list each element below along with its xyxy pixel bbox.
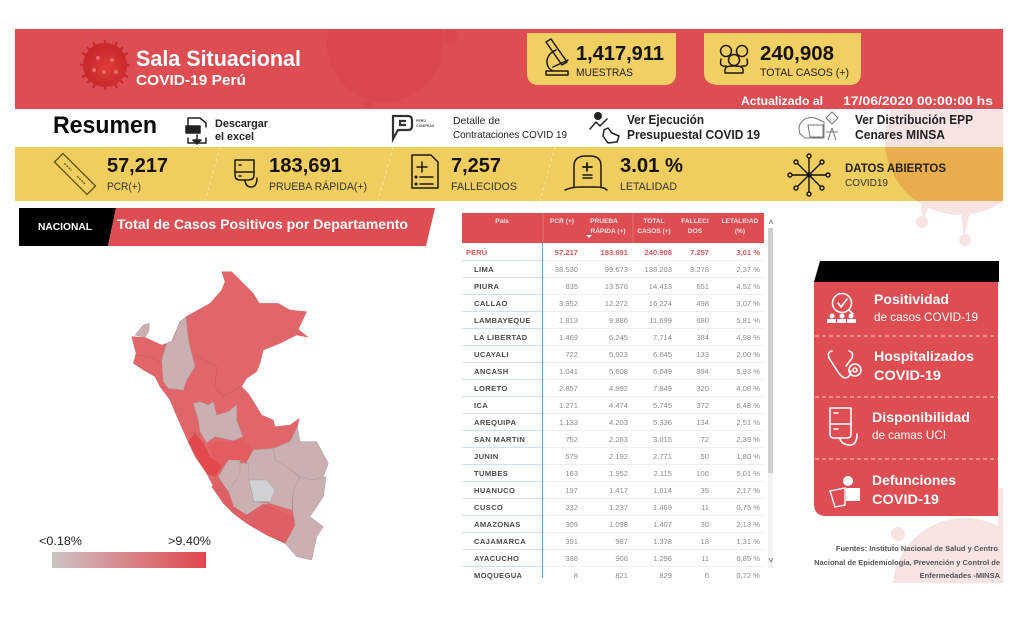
map: high positivity departments <box>132 272 308 543</box>
table rows: CAJAMARCA <box>474 537 526 546</box>
table rows: 1.378 <box>653 537 672 546</box>
section header: total de casos: Total de Casos Positivos por Departamento <box>117 216 408 232</box>
link: peru compras: Detalle de <box>453 115 500 127</box>
table rows: 987 <box>615 537 628 546</box>
table rows: 6,48 % <box>736 401 760 410</box>
subtitle: COVID-19 Perú <box>136 73 246 89</box>
nav item: disponibilidad: Disponibilidad <box>872 409 970 425</box>
table rows: 11 <box>701 503 709 512</box>
table rows: 1.469 <box>559 333 578 342</box>
table rows: ANCASH <box>474 367 509 376</box>
table rows: 0,85 % <box>736 554 760 563</box>
link: distribucion EPP: Cenares MINSA <box>855 128 945 142</box>
table header: PRUEBA <box>590 218 618 225</box>
table rows: 5.336 <box>653 418 672 427</box>
table rows: 133 <box>696 350 709 359</box>
link: distribucion EPP <box>799 112 973 142</box>
table rows: 384 <box>696 333 709 342</box>
table rows: 4,08 % <box>736 384 760 393</box>
decorative virus background right <box>885 110 1003 583</box>
kpi: prueba rapida: 183,691 <box>269 155 342 177</box>
table rows: 5.608 <box>609 367 628 376</box>
table header: FALLECI <box>681 218 709 225</box>
table rows: 1,80 % <box>736 452 760 461</box>
table rows: SAN MARTIN <box>474 435 525 444</box>
kpi: fallecidos <box>412 155 517 193</box>
table rows: 5.923 <box>609 350 628 359</box>
table rows: 16.224 <box>649 299 672 308</box>
kpi: datos abiertos: COVID19 <box>845 177 888 189</box>
kpi: datos abiertos <box>788 154 946 196</box>
table header: LETALIDAD <box>722 218 759 225</box>
kpi: pcr: PCR(+) <box>107 181 141 193</box>
table rows: AREQUIPA <box>474 418 516 427</box>
links row <box>53 112 973 144</box>
table rows: 106 <box>696 469 709 478</box>
update date: Actualizado al <box>741 94 823 108</box>
table rows: 4,98 % <box>736 333 760 342</box>
table rows: 11.699 <box>649 316 672 325</box>
table rows: 2,13 % <box>736 520 760 529</box>
table row separators <box>462 243 764 578</box>
table total row: 3,01 % <box>736 248 760 257</box>
table rows: 908 <box>615 554 628 563</box>
table rows: 72 <box>701 435 709 444</box>
table rows: 232 <box>565 503 578 512</box>
table rows: 1.407 <box>653 520 672 529</box>
sources note <box>814 544 1001 580</box>
card: muestras: MUESTRAS <box>576 67 633 79</box>
card: muestras <box>527 33 676 85</box>
kpi: pcr: 57,217 <box>107 155 168 177</box>
nav item: positividad <box>827 291 978 324</box>
table rows: 7.714 <box>653 333 672 342</box>
link: peru compras: COMPRAS <box>416 124 435 128</box>
table rows: 2,17 % <box>736 486 760 495</box>
table rows: 394 <box>696 367 709 376</box>
map legend: <0.18% <box>39 534 82 548</box>
nav item: defunciones: COVID-19 <box>872 491 939 507</box>
table header: PCR (+) <box>550 218 574 225</box>
table rows: 1.098 <box>609 520 628 529</box>
table rows: 163 <box>565 469 578 478</box>
table header: (%) <box>735 228 745 235</box>
table rows: ICA <box>474 401 488 410</box>
link: peru compras: PERÚ <box>416 118 426 123</box>
table rows: PIURA <box>474 282 500 291</box>
table rows: 134 <box>696 418 709 427</box>
table rows: 821 <box>615 571 628 580</box>
nav item: hospitalizados: Hospitalizados <box>874 348 974 364</box>
table rows: 372 <box>696 401 709 410</box>
table rows: LIMA <box>474 265 494 274</box>
map: central department <box>208 438 253 467</box>
table rows: 7.849 <box>653 384 672 393</box>
card: total casos: 240,908 <box>760 43 834 65</box>
table rows: 11 <box>701 554 709 563</box>
kpi: prueba rapida: PRUEBA RÁPIDA(+) <box>269 180 367 193</box>
table rows: 6.245 <box>609 333 628 342</box>
table rows: AMAZONAS <box>474 520 521 529</box>
table rows: 1.271 <box>559 401 578 410</box>
table header: TOTAL <box>643 218 665 225</box>
nav item: defunciones <box>830 472 956 507</box>
table rows: UCAYALI <box>474 350 509 359</box>
map of Peru <box>132 272 328 560</box>
kpi: fallecidos: FALLECIDOS <box>451 181 517 193</box>
panel: navigation <box>814 261 999 516</box>
table rows: 138.203 <box>645 265 672 274</box>
table rows: 2.857 <box>559 384 578 393</box>
table rows: 579 <box>565 452 578 461</box>
table rows: 4,52 % <box>736 282 760 291</box>
table rows: 2.771 <box>653 452 672 461</box>
table rows: 5,93 % <box>736 367 760 376</box>
link: peru compras <box>393 115 567 141</box>
table header: CASOS (+) <box>637 228 671 235</box>
icon: microscope <box>546 39 568 75</box>
map: internal borders <box>137 355 240 433</box>
table rows: CUSCO <box>474 503 503 512</box>
table rows: 2.192 <box>609 452 628 461</box>
table rows: 6.649 <box>653 367 672 376</box>
kpi: letalidad: 3.01 % <box>620 155 683 177</box>
table rows: 0,72 % <box>736 571 760 580</box>
table rows: 1.469 <box>653 503 672 512</box>
nav item: positividad: de casos COVID-19 <box>874 310 978 324</box>
nav item: disponibilidad: de camas UCI <box>872 428 946 442</box>
map legend: >9.40% <box>168 534 211 548</box>
table rows: 1.237 <box>609 503 628 512</box>
table rows: 388 <box>565 554 578 563</box>
table rows: TUMBES <box>474 469 508 478</box>
link: peru compras: Contrataciones COVID 19 <box>453 129 567 141</box>
table rows: 3.278 <box>690 265 709 274</box>
icon: people <box>720 46 748 73</box>
sources note: Enfermedades -MINSA <box>920 571 1001 580</box>
table total row: 7.257 <box>690 248 709 257</box>
kpi: letalidad: LETALIDAD <box>620 181 677 193</box>
update date: 17/06/2020 00:00:00 hs <box>843 94 993 108</box>
table rows: 835 <box>565 282 578 291</box>
link: descargar excel: el excel <box>215 131 254 143</box>
sources note: Nacional de Epidemiología, Prevención y Control de <box>814 558 1000 567</box>
section header: total de casos <box>19 208 435 246</box>
table rows: 1.133 <box>559 418 578 427</box>
table rows: 5,81 % <box>736 316 760 325</box>
table rows: 5.745 <box>653 401 672 410</box>
table rows: 50 <box>701 452 709 461</box>
title: Sala Situacional <box>136 46 301 71</box>
table rows: 320 <box>696 384 709 393</box>
map: lowest value department <box>249 480 275 502</box>
table rows: 0,75 % <box>736 503 760 512</box>
nav item: disponibilidad <box>830 408 970 445</box>
table rows: 1.041 <box>559 367 578 376</box>
table total row: 183.691 <box>601 248 629 257</box>
table scrollbar <box>768 220 773 568</box>
table rows: 1.614 <box>653 486 672 495</box>
table rows: 3.015 <box>653 435 672 444</box>
table rows: 12.272 <box>605 299 628 308</box>
kpi: prueba rapida <box>235 155 367 193</box>
table rows: 722 <box>565 350 578 359</box>
link: ejecucion presupuestal <box>590 112 760 143</box>
table of cases by department <box>462 213 773 580</box>
table rows: 3,07 % <box>736 299 760 308</box>
table rows: 13.578 <box>605 282 628 291</box>
table rows: 4.474 <box>609 401 628 410</box>
table rows: 18 <box>701 537 709 546</box>
table rows: 30 <box>701 520 709 529</box>
table rows: 2.263 <box>609 435 628 444</box>
table rows: LORETO <box>474 384 508 393</box>
table rows: 14.413 <box>649 282 672 291</box>
table total row: 240.908 <box>645 248 672 257</box>
table rows: 680 <box>696 316 709 325</box>
table rows: 2,51 % <box>736 418 760 427</box>
heading: resumen: Resumen <box>53 112 157 139</box>
table rows: 752 <box>565 435 578 444</box>
table total row <box>466 248 760 257</box>
card: total casos <box>704 33 861 85</box>
map: low positivity departments <box>135 317 328 560</box>
table rows: 35 <box>701 486 709 495</box>
map: arequipa <box>212 482 295 543</box>
table rows: 2,00 % <box>736 350 760 359</box>
table rows: 829 <box>659 571 672 580</box>
table header <box>462 213 764 243</box>
link: descargar excel <box>186 118 269 144</box>
table header: País <box>495 218 509 225</box>
table header: DOS <box>688 228 703 235</box>
table rows: 651 <box>696 282 709 291</box>
table rows: 1,31 % <box>736 537 760 546</box>
map legend <box>39 534 211 568</box>
decorative banner virus <box>327 29 457 108</box>
table rows: JUNIN <box>474 452 499 461</box>
table rows: 5,01 % <box>736 469 760 478</box>
table rows: 4.992 <box>609 384 628 393</box>
table rows: 1.952 <box>609 469 628 478</box>
table rows: HUANUCO <box>474 486 515 495</box>
table rows: 99.673 <box>605 265 628 274</box>
table rows: 197 <box>565 486 578 495</box>
icon: virus logo <box>80 40 130 90</box>
table rows: 1.417 <box>609 486 628 495</box>
link: ejecucion presupuestal: Presupuestal COVID 19 <box>627 128 760 142</box>
kpi: letalidad <box>565 155 683 193</box>
table rows: 309 <box>565 520 578 529</box>
table rows: 2.115 <box>654 469 672 478</box>
table rows: 1.813 <box>559 316 578 325</box>
table rows: AYACUCHO <box>474 554 519 563</box>
table rows: 2,37 % <box>736 265 760 274</box>
table header: RÁPIDA (+) <box>590 226 626 235</box>
kpi: fallecidos: 7,257 <box>451 155 501 177</box>
nav item: hospitalizados: COVID-19 <box>874 367 941 383</box>
table rows: 8 <box>574 571 578 580</box>
nav item: positividad: Positividad <box>874 291 949 307</box>
table total row: 57.217 <box>555 248 578 257</box>
table rows: 9.886 <box>609 316 628 325</box>
KPI bar <box>15 147 1003 201</box>
table rows: CALLAO <box>474 299 508 308</box>
card: muestras: 1,417,911 <box>576 43 664 65</box>
header banner <box>15 29 1003 109</box>
table rows: 38.530 <box>555 265 578 274</box>
table rows: 1.296 <box>653 554 672 563</box>
table rows: 6 <box>705 571 709 580</box>
table rows: 3.952 <box>559 299 578 308</box>
table rows: MOQUEGUA <box>474 571 523 580</box>
sources note: Fuentes: Instituto Nacional de Salud y Centro <box>836 544 998 553</box>
table rows: 391 <box>565 537 578 546</box>
table rows: LA LIBERTAD <box>474 333 528 342</box>
table rows: 4.203 <box>609 418 628 427</box>
table rows: LAMBAYEQUE <box>474 316 531 325</box>
link: descargar excel: Descargar <box>215 118 269 130</box>
table total row: PERÚ <box>466 248 488 257</box>
table rows: 498 <box>696 299 709 308</box>
card: total casos: TOTAL CASOS (+) <box>760 67 849 79</box>
link: ejecucion presupuestal: Ver Ejecución <box>627 113 704 127</box>
update date <box>741 94 993 108</box>
kpi: datos abiertos: DATOS ABIERTOS <box>845 161 946 175</box>
table rows: 6.645 <box>653 350 672 359</box>
section header: total de casos: NACIONAL <box>38 221 93 233</box>
table rows <box>474 265 760 580</box>
nav item: defunciones: Defunciones <box>872 472 956 488</box>
link: distribucion EPP: Ver Distribución EPP <box>855 113 973 127</box>
map: highest value department <box>188 433 222 477</box>
nav item: hospitalizados <box>828 348 974 383</box>
kpi: pcr <box>54 153 168 195</box>
table rows: 2,39 % <box>736 435 760 444</box>
